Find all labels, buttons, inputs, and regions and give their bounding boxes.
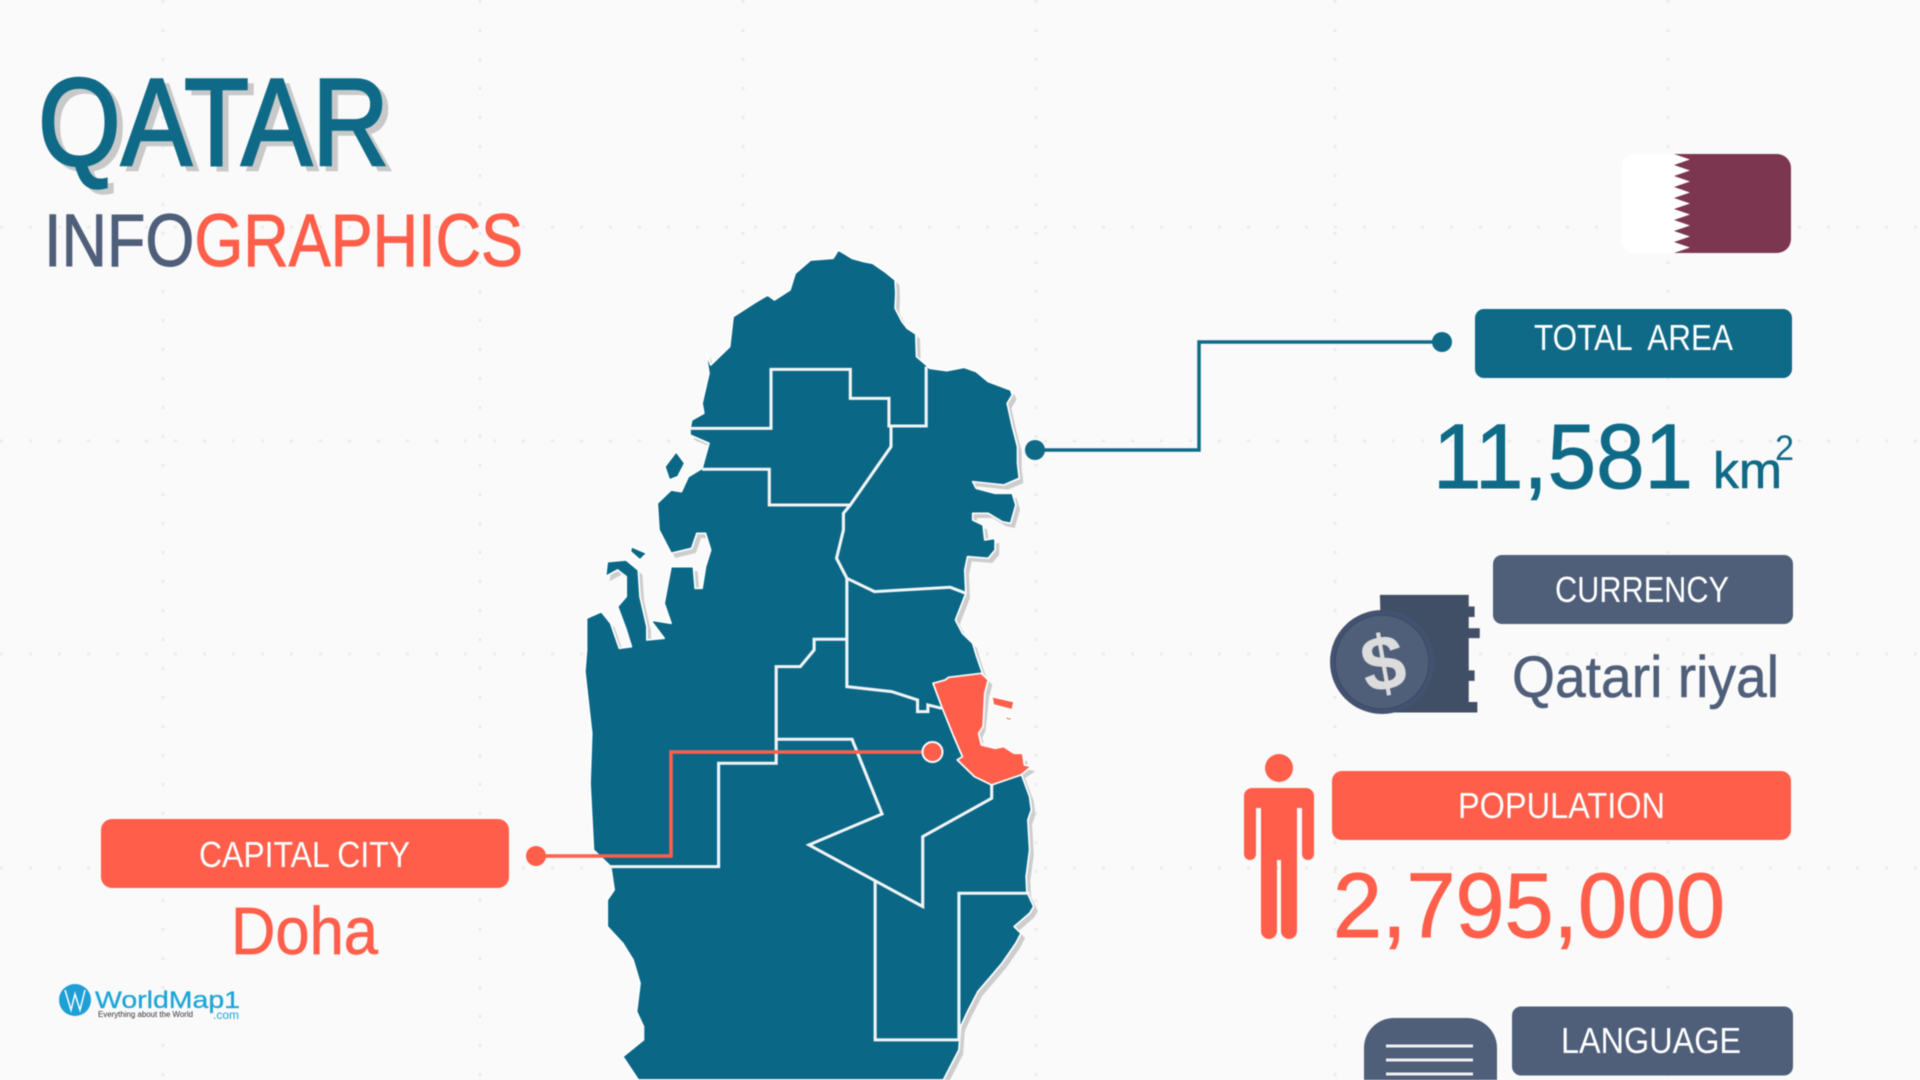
language label: LANGUAGE	[1561, 1020, 1741, 1061]
connector: capital city	[526, 742, 942, 866]
map: Qatar municipalities	[585, 250, 1038, 1080]
map shadow	[589, 255, 1038, 1080]
icon: coin stack: $	[1354, 616, 1412, 710]
currency badge	[1493, 555, 1793, 624]
map landmass	[585, 250, 1034, 1080]
capital label: CAPITAL CITY	[199, 834, 410, 875]
logo suffix: .com	[213, 1008, 239, 1022]
population value: 2,795,000	[1333, 855, 1725, 957]
total area label: TOTAL AREA	[1534, 317, 1733, 358]
population label: POPULATION	[1458, 785, 1665, 826]
icon: person	[1244, 754, 1314, 939]
logo: WorldMap1	[59, 984, 240, 1022]
capital badge	[101, 819, 509, 888]
total area badge	[1475, 309, 1792, 378]
panel: currency	[1330, 555, 1793, 714]
total area value: 11,581	[1433, 406, 1693, 508]
icon: globe	[59, 984, 91, 1016]
title: QATAR: QATAR	[38, 54, 389, 192]
panel: capital city	[101, 819, 509, 969]
currency label: CURRENCY	[1555, 569, 1729, 610]
panel: total area	[1433, 309, 1794, 508]
capital municipality: Doha	[933, 673, 1031, 785]
flag of Qatar	[1622, 154, 1791, 253]
logo wordmark: WorldMap1	[95, 987, 240, 1014]
subtitle: INFOGRAPHICS: INFOGRAPHICS	[44, 199, 523, 282]
logo tagline: Everything about the World	[98, 1010, 193, 1019]
currency value: Qatari riyal	[1512, 645, 1779, 710]
icon: coin stack	[1330, 595, 1480, 714]
panel: language	[1364, 1006, 1793, 1080]
capital value: Doha	[231, 894, 379, 969]
language badge	[1512, 1006, 1793, 1076]
population badge	[1332, 771, 1791, 840]
connector: total area	[1025, 332, 1452, 460]
total area unit: km	[1713, 442, 1782, 499]
panel: population	[1244, 754, 1791, 957]
icon: speech bubble	[1364, 1018, 1497, 1080]
total area superscript: 2	[1775, 429, 1794, 468]
municipality borders	[607, 367, 1030, 1040]
